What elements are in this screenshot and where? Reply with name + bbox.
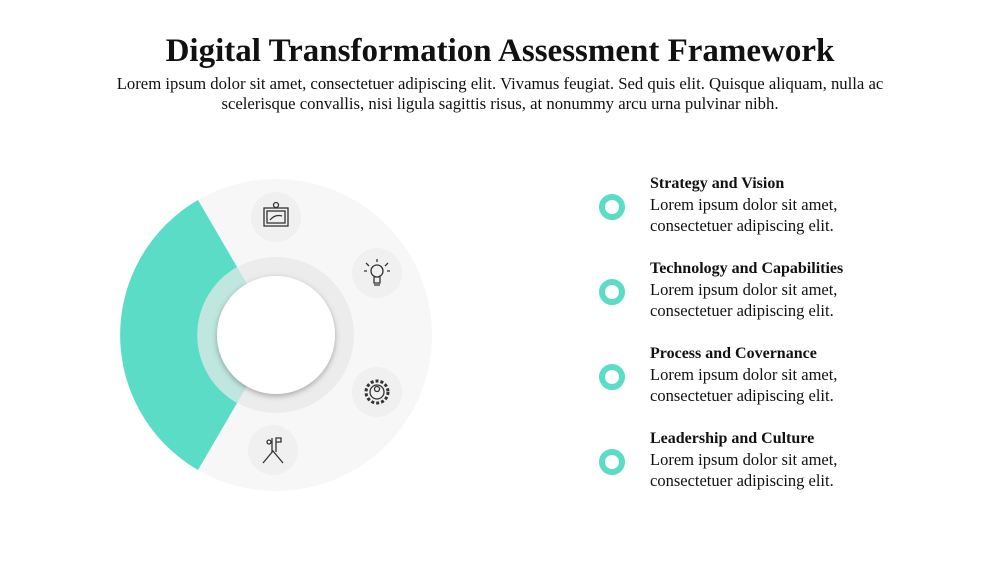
text: Lorem ipsum dolor sit amet, bbox=[650, 450, 837, 469]
text: Leadership and Culture bbox=[650, 430, 814, 447]
text: Lorem ipsum dolor sit amet, bbox=[650, 365, 837, 384]
text: Process and Covernance bbox=[650, 345, 817, 362]
icon: bulb bbox=[352, 248, 402, 298]
list item 1 bbox=[599, 175, 837, 235]
subtitle bbox=[117, 74, 883, 113]
list item 4 bbox=[599, 430, 837, 490]
title: Digital Transformation Assessment Framework bbox=[166, 33, 834, 69]
subtitle: scelerisque convallis, nisi ligula sagittis risus, at nonummy arcu urna pulvinar nibh. bbox=[221, 94, 779, 113]
list item 2 bbox=[599, 260, 843, 320]
teal segment bbox=[120, 200, 240, 470]
icon: board bbox=[251, 192, 301, 242]
list item 3 bbox=[599, 345, 837, 405]
text: consectetuer adipiscing elit. bbox=[650, 301, 834, 320]
text: Strategy and Vision bbox=[650, 175, 784, 192]
text: consectetuer adipiscing elit. bbox=[650, 471, 834, 490]
text: Lorem ipsum dolor sit amet, bbox=[650, 195, 837, 214]
text: consectetuer adipiscing elit. bbox=[650, 216, 834, 235]
text: Technology and Capabilities bbox=[650, 260, 843, 277]
icon: flag bbox=[248, 425, 298, 475]
subtitle: Lorem ipsum dolor sit amet, consectetuer adipiscing elit. Vivamus feugiat. Sed quis elit. Quisque aliquam, nulla ac bbox=[117, 74, 883, 93]
icon: gear bbox=[352, 367, 402, 417]
text: consectetuer adipiscing elit. bbox=[650, 386, 834, 405]
text: Lorem ipsum dolor sit amet, bbox=[650, 280, 837, 299]
